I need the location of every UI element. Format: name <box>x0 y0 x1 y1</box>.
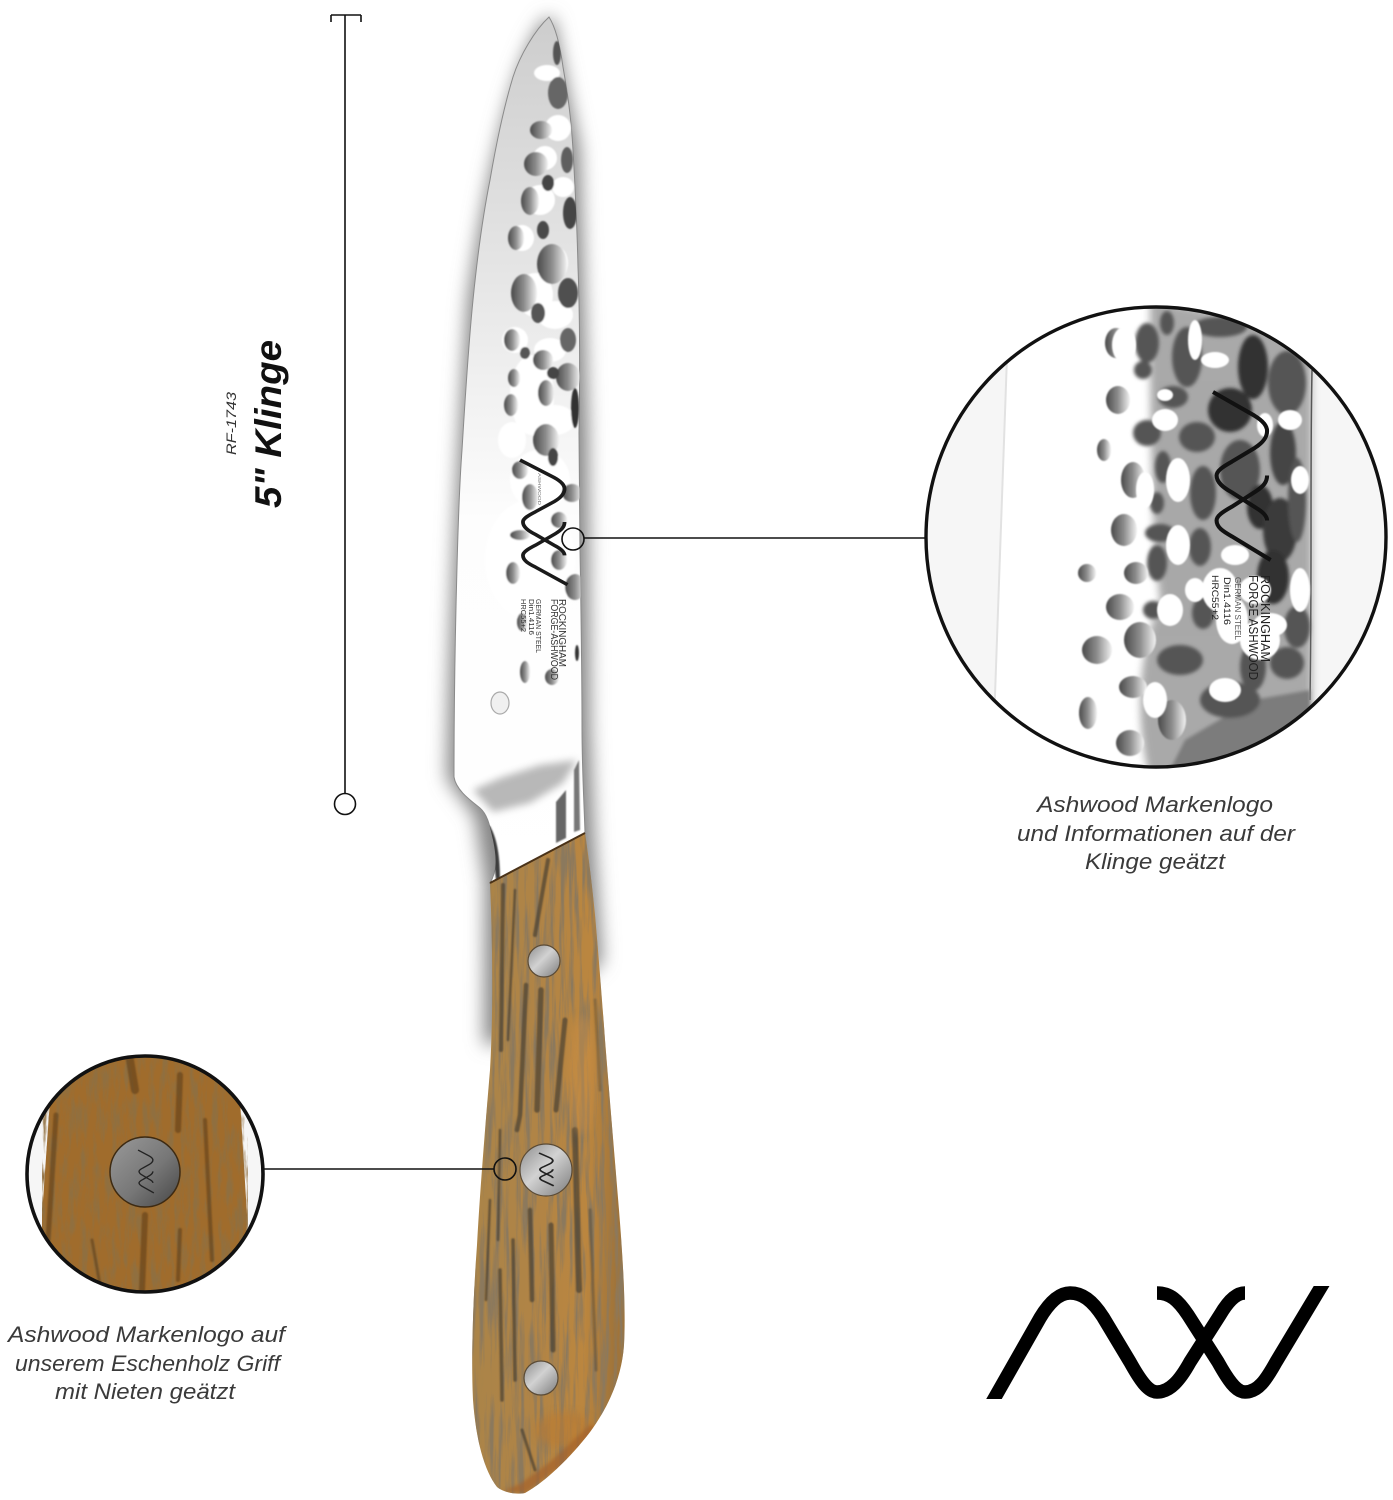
callout: blade logo magnifier <box>562 300 1393 790</box>
dimension line: blade length <box>331 15 361 814</box>
zoomed rivet <box>110 1137 180 1207</box>
dark grain streaks <box>486 860 600 1470</box>
top rivet <box>528 945 560 977</box>
zoomed handle photo <box>29 1058 261 1290</box>
leader line to handle zoom <box>264 1168 494 1170</box>
left dimple column <box>1078 328 1186 756</box>
rivet logo <box>539 1153 554 1186</box>
wooden handle <box>472 832 625 1494</box>
engraved text on blade: GERMAN STEEL <box>534 599 541 653</box>
engraved text on blade: ASHWOOD <box>537 473 542 506</box>
etched logo zoomed <box>1213 392 1271 560</box>
caption: blade logo: Ashwood Markenlogo <box>1035 792 1273 817</box>
caption: handle logo: mit Nieten geätzt <box>55 1379 237 1404</box>
leader line to blade zoom <box>584 537 926 539</box>
knife shadow <box>452 22 597 1040</box>
engraved text on blade: Din1.4116 <box>527 599 534 635</box>
marker circle on handle <box>494 1158 516 1180</box>
heading: blade size <box>224 340 289 508</box>
dimple near heel <box>491 692 509 714</box>
bolster stripes <box>486 760 580 880</box>
brand logo <box>986 1286 1330 1399</box>
caption: blade logo: Klinge geätzt <box>1085 849 1227 874</box>
etched text zoomed: FORGE ASHWOOD <box>1246 575 1261 680</box>
engraved text on blade: FORGE-ASHWOOD <box>548 599 559 680</box>
engraved text on blade <box>519 473 567 680</box>
hammered dark patches <box>1133 311 1310 790</box>
etched text zoomed: GERMAN STEEL <box>1233 577 1243 640</box>
engraved logo on blade <box>520 460 567 585</box>
marker circle on blade <box>562 528 584 550</box>
callout: handle logo magnifier <box>20 1050 516 1300</box>
zoomed blade photo <box>928 308 1384 766</box>
engraved text on blade: HRC55+2 <box>519 599 526 632</box>
magnifier ring <box>926 307 1386 767</box>
etched text zoomed: HRC55+2 <box>1209 575 1220 620</box>
engraved text on blade: ROCKINGHAM <box>556 599 567 667</box>
magnifier ring <box>27 1056 263 1292</box>
knife <box>454 17 635 1500</box>
etched text zoomed: ROCKINGHAM <box>1258 575 1273 662</box>
caption: blade logo: und Informationen auf der <box>1017 821 1297 846</box>
heel shading <box>473 760 577 812</box>
warm highlight <box>568 1015 596 1135</box>
hammered dimples <box>473 41 585 880</box>
etched text zoomed <box>1212 576 1270 680</box>
model number: RF-1743 <box>224 391 239 455</box>
bottom rivet <box>524 1361 558 1395</box>
wood grain <box>42 1050 248 1300</box>
etched text zoomed: Din1.4116 <box>1221 577 1232 625</box>
zoomed rivet logo <box>138 1150 154 1193</box>
caption: handle logo: unserem Eschenholz Griff <box>15 1351 283 1376</box>
blade <box>454 17 585 883</box>
mid-grey hammered zone <box>1140 300 1312 780</box>
middle rivet with logo <box>520 1144 572 1196</box>
hammered highlights <box>1112 320 1310 718</box>
caption: blade logo <box>1017 792 1297 874</box>
blade size label: 5" Klinge <box>248 340 289 508</box>
caption: handle logo <box>6 1322 288 1404</box>
caption: handle logo: Ashwood Markenlogo auf <box>6 1322 288 1347</box>
